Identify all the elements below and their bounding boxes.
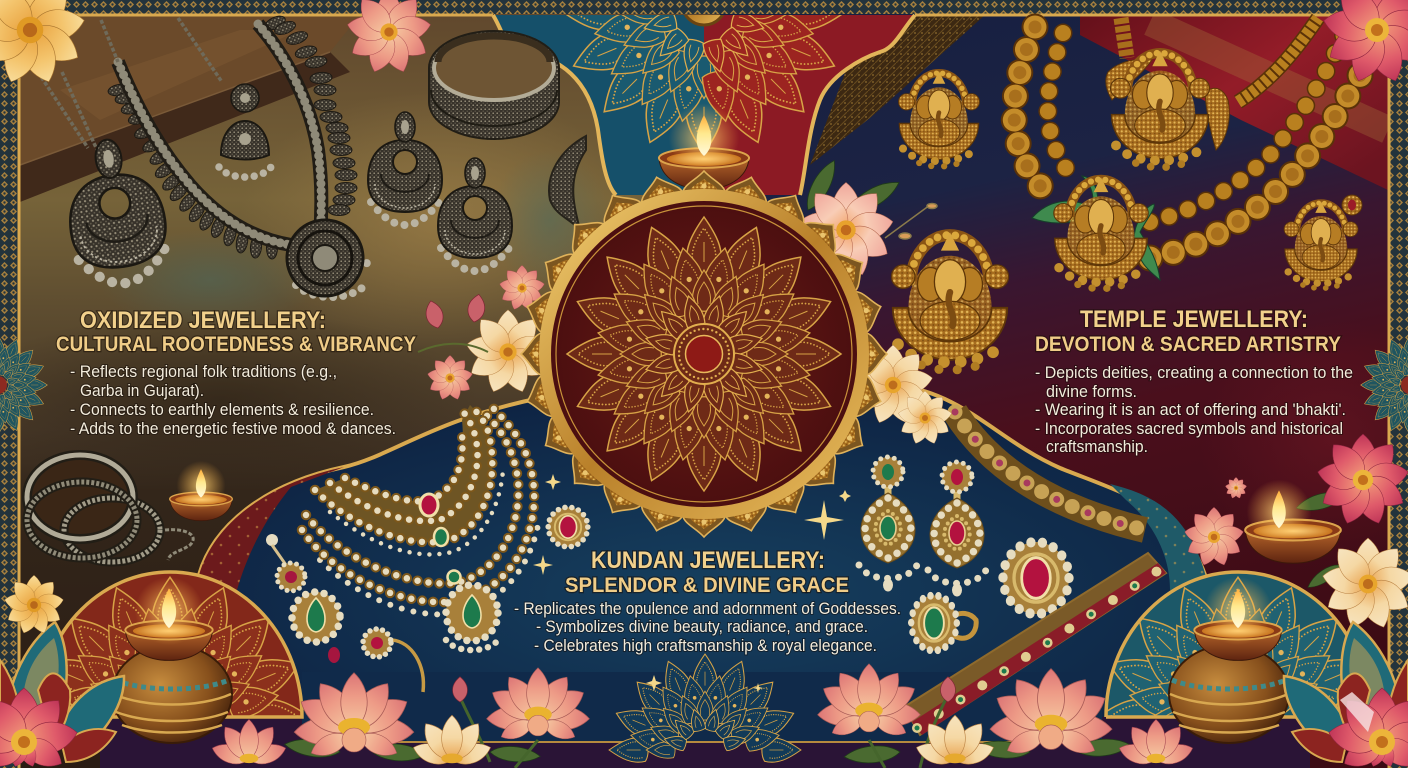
coin necklace xyxy=(1014,27,1362,258)
magenta flower xyxy=(1316,434,1408,528)
bullets: Garba in Gujarat). xyxy=(80,382,204,400)
stems xyxy=(459,695,948,768)
right pot and diya xyxy=(1169,577,1289,743)
maroon corner band xyxy=(199,467,344,590)
left side mandala xyxy=(0,336,47,434)
center xyxy=(674,324,734,384)
brown patterned cloth xyxy=(810,15,985,165)
heading: DEVOTION & SACRED ARTISTRY xyxy=(1035,333,1341,356)
bullets: - Replicates the opulence and adornment of Goddesses. xyxy=(514,600,901,618)
bullets: - Incorporates sacred symbols and historical xyxy=(1035,420,1343,438)
background: oxidized rust panel xyxy=(0,0,720,768)
mandala xyxy=(567,217,841,491)
background: kundan navy panel xyxy=(190,384,1240,768)
bullets: craftsmanship. xyxy=(1046,438,1148,456)
background: temple navy and maroon panel xyxy=(720,0,1408,768)
silver bangles bottom xyxy=(27,455,193,562)
kundan earrings xyxy=(859,457,986,596)
heading: KUNDAN JEWELLERY: xyxy=(591,547,825,574)
cream flower xyxy=(1321,538,1408,632)
leaves xyxy=(1294,488,1347,592)
bullets xyxy=(70,363,396,438)
flower top left pink xyxy=(345,0,433,76)
cream flower right xyxy=(852,345,953,446)
peacocks xyxy=(1032,59,1229,280)
ornate corner bottom right xyxy=(1284,622,1408,768)
red cloth xyxy=(1080,15,1388,190)
right side flowers and diya xyxy=(1183,434,1408,632)
sparkles xyxy=(533,474,851,693)
wood plank xyxy=(20,15,360,202)
upper bead chains xyxy=(1121,18,1318,102)
buds xyxy=(453,677,955,702)
heading: SPLENDOR & DIVINE GRACE xyxy=(565,574,849,597)
small diya left xyxy=(170,461,232,521)
top diya xyxy=(659,103,749,189)
silver chandbali pendant xyxy=(38,72,173,290)
gold ring xyxy=(545,195,863,513)
kundan pendant right xyxy=(446,585,498,650)
silver necklace xyxy=(101,13,368,297)
leaves upper right xyxy=(801,157,903,220)
bullets: divine forms. xyxy=(1046,383,1137,401)
teal corner band xyxy=(1110,484,1212,604)
flower top right xyxy=(1321,0,1408,86)
kundan nose piece xyxy=(363,629,423,692)
text: kundan jewellery xyxy=(514,547,901,655)
heading xyxy=(565,547,849,597)
flower top left xyxy=(0,0,87,87)
pink flower left xyxy=(427,265,545,402)
heading: OXIDIZED JEWELLERY: xyxy=(80,307,326,334)
buds left xyxy=(418,293,488,352)
heading xyxy=(56,307,416,356)
cream flower left xyxy=(464,310,552,396)
ganesha pendants xyxy=(892,51,1362,370)
gold twig xyxy=(885,204,937,239)
bottom lotus row xyxy=(210,664,1195,768)
silver jhumka pendant xyxy=(178,18,271,177)
bullets: - Symbolizes divine beauty, radiance, and grace. xyxy=(536,618,868,636)
central medallion xyxy=(521,171,887,537)
top mandala panel xyxy=(493,0,915,195)
golden flower left edge xyxy=(3,575,65,636)
green leaves xyxy=(283,736,1132,765)
silver bangles top xyxy=(429,31,559,139)
silver earrings xyxy=(368,112,512,271)
bottom purple strip xyxy=(100,672,1310,768)
gemstone band lower xyxy=(904,553,1166,735)
diya right xyxy=(1245,480,1341,563)
bullets: - Adds to the energetic festive mood & dances. xyxy=(70,420,396,438)
gemstone band upper xyxy=(955,412,1145,530)
bullets xyxy=(1035,364,1353,456)
ornate corner bottom left xyxy=(0,622,124,768)
bullets: - Connects to earthly elements & resilience. xyxy=(70,401,374,419)
text: oxidized jewellery xyxy=(56,307,416,438)
heading xyxy=(1035,306,1341,356)
kundan necklace xyxy=(302,405,538,614)
lotus flowers xyxy=(210,664,1195,768)
bullets: - Depicts deities, creating a connection to the xyxy=(1035,364,1353,382)
foliage and flowers around medallion xyxy=(418,157,953,446)
text: temple jewellery xyxy=(1035,306,1353,456)
silver scroll ornament xyxy=(549,136,586,230)
bullets xyxy=(514,600,901,655)
kundan rings xyxy=(911,542,1069,651)
scalloped edge xyxy=(521,171,887,537)
heading: CULTURAL ROOTEDNESS & VIBRANCY xyxy=(56,333,416,356)
left pot and diya xyxy=(112,577,232,743)
right side mandala xyxy=(1361,336,1408,434)
bottom mandala xyxy=(609,654,801,762)
panel: temple jewellery items xyxy=(892,18,1362,370)
pink flower small xyxy=(1183,477,1247,568)
left and right leaf rows xyxy=(107,13,357,259)
pink flower upper right xyxy=(797,182,895,279)
kundan stud xyxy=(548,507,588,547)
panel: oxidized jewellery items xyxy=(27,13,586,562)
bullets: - Celebrates high craftsmanship & royal elegance. xyxy=(534,637,877,655)
heading: TEMPLE JEWELLERY: xyxy=(1080,306,1308,333)
bullets: - Reflects regional folk traditions (e.g., xyxy=(70,363,337,381)
mandala arch left xyxy=(61,570,304,719)
panel: kundan jewellery items xyxy=(266,405,1166,735)
bullets: - Wearing it is an act of offering and 'bhakti'. xyxy=(1035,401,1346,419)
mandala arch right xyxy=(1104,570,1347,719)
kundan pendant left xyxy=(266,534,340,663)
